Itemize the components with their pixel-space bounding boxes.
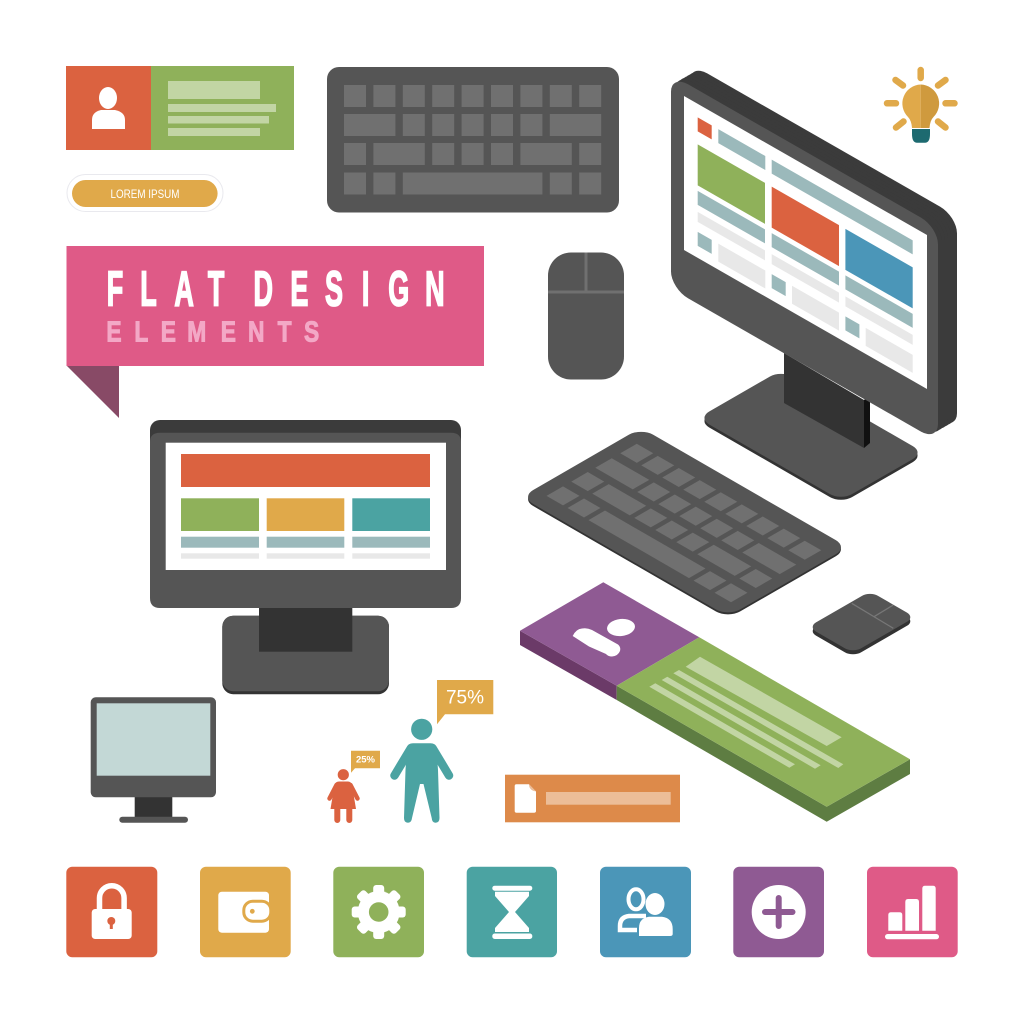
icon: user bbox=[92, 87, 125, 129]
heading: flat design: FLATDESIGN bbox=[107, 262, 445, 317]
title banner bbox=[66, 246, 484, 418]
banner fold bbox=[67, 366, 119, 418]
callout: 75% bbox=[437, 680, 493, 724]
text lines bbox=[649, 657, 843, 769]
button: lorem ipsum: LOREM IPSUM bbox=[110, 187, 180, 201]
figure bbox=[330, 769, 358, 820]
icon: light bulb bbox=[887, 70, 954, 143]
monitor neck bbox=[259, 606, 352, 652]
monitor base bbox=[222, 616, 389, 694]
keyboard: front view bbox=[327, 67, 619, 212]
subheading: elements: ELEMENTS bbox=[106, 317, 319, 348]
mouse: top view bbox=[548, 252, 624, 380]
text lines bbox=[168, 81, 276, 136]
icon tile: plus bbox=[733, 867, 824, 957]
isometric profile card bbox=[520, 582, 910, 822]
monitor back edge bbox=[675, 64, 957, 439]
icon tile: bar chart bbox=[867, 867, 958, 957]
person: woman with 25% bbox=[330, 751, 380, 820]
isometric monitor bbox=[671, 64, 957, 504]
callout: 75%: 75% bbox=[446, 687, 484, 708]
icon tile: lock bbox=[66, 867, 157, 957]
profile card bbox=[66, 66, 294, 150]
monitor neck bbox=[784, 353, 870, 448]
monitor body bbox=[150, 420, 461, 480]
icon: document bbox=[515, 784, 536, 813]
button: lorem ipsum bbox=[67, 174, 223, 212]
card green top bbox=[617, 637, 910, 807]
front monitor bbox=[150, 420, 461, 694]
card sides bbox=[520, 631, 617, 700]
monitor screen bbox=[166, 443, 446, 570]
figure bbox=[394, 719, 449, 823]
icon tile: wallet bbox=[200, 867, 291, 957]
small monitor bbox=[91, 697, 216, 823]
monitor screen bbox=[684, 96, 927, 389]
isometric mouse bbox=[808, 591, 915, 657]
orange file bar bbox=[505, 775, 680, 822]
card purple top bbox=[520, 582, 699, 686]
icon: user bbox=[573, 618, 636, 656]
person: man with 75% bbox=[394, 680, 493, 823]
icon tile: gear bbox=[333, 867, 424, 957]
icon tile: users bbox=[600, 867, 691, 957]
isometric keyboard bbox=[521, 428, 848, 618]
monitor front bbox=[671, 75, 938, 441]
monitor base bbox=[698, 370, 924, 504]
callout: 25%: 25% bbox=[356, 755, 376, 766]
icon tile: hourglass bbox=[467, 867, 557, 957]
